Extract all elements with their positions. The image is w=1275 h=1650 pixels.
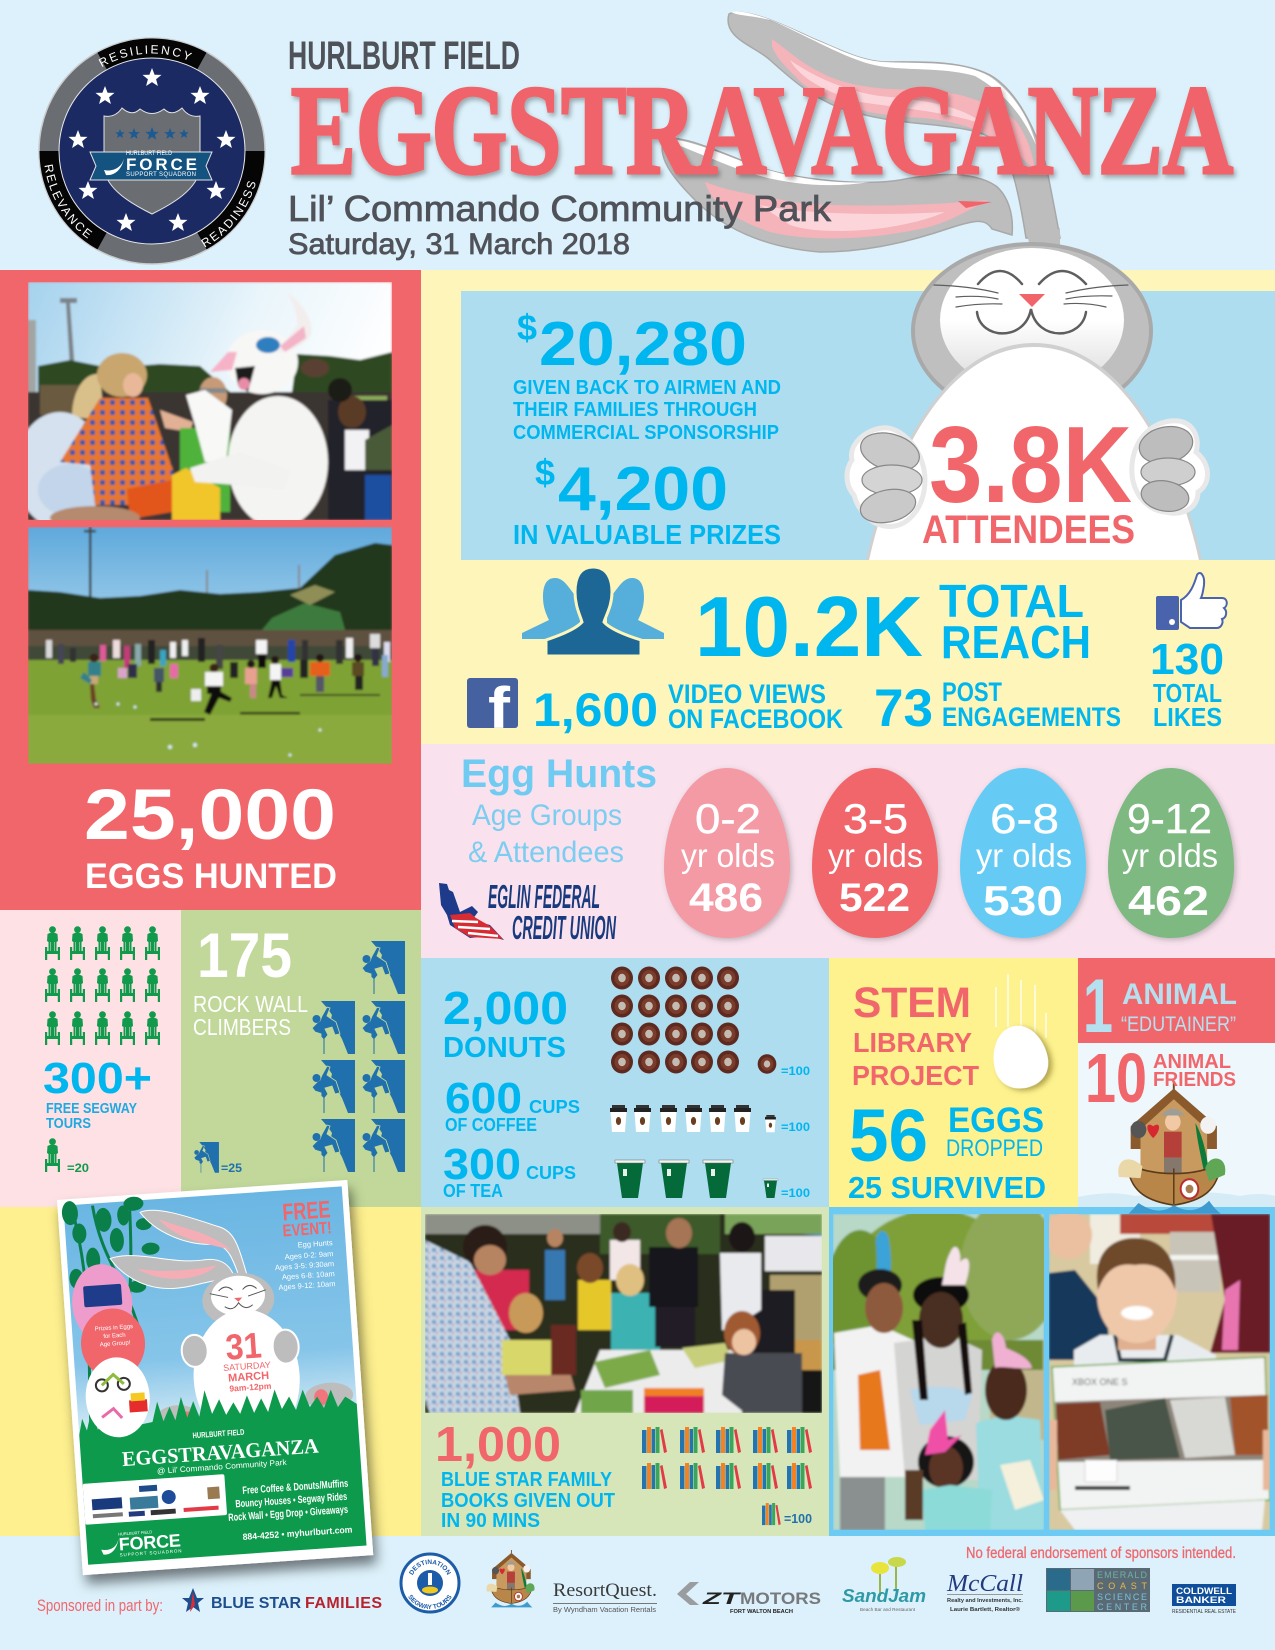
logo: destination segway tours: [400, 1552, 460, 1614]
egg: 0-2: yr olds: [681, 837, 775, 874]
stat: tea: 300: [443, 1140, 521, 1189]
location: Lil’ Commando Community Park: [288, 188, 832, 229]
egg: 3-5: 3-5: [843, 795, 908, 842]
stat: animal edutainer: ANIMAL: [1122, 978, 1237, 1011]
poster force logo: FORCE: [118, 1530, 181, 1555]
logo: coldwell banker: BANKER: [1176, 1595, 1227, 1605]
stat: books: BOOKS GIVEN OUT: [441, 1490, 615, 1512]
logo: blue star families: BLUE STAR: [211, 1595, 301, 1612]
stat: total likes: TOTAL: [1153, 678, 1222, 708]
logo: emerald coast science center: [1046, 1568, 1150, 1612]
poster free event: Ages 0-2: 9am: [284, 1249, 334, 1261]
badge: force support squadron: READINESS: [201, 181, 256, 248]
poster date: MARCH: [228, 1370, 270, 1385]
heading: egg hunts: & Attendees: [468, 836, 624, 869]
poster free event: FREE: [282, 1196, 331, 1226]
stat: total reach: [695, 575, 1091, 675]
stat: post engagements: 73: [874, 679, 933, 738]
poster free event: EVENT!: [282, 1218, 332, 1241]
prizes amount: IN VALUABLE PRIZES: [513, 519, 781, 550]
bunny left hand: [847, 427, 925, 527]
poster free event: Ages 3-5: 9:30am: [275, 1259, 334, 1272]
poster title: HURLBURT FIELD: [192, 1428, 245, 1440]
text: EGLIN FEDERAL: [488, 878, 600, 915]
stat: segway tours: [43, 1054, 152, 1132]
stat: segway tours: 300+: [43, 1054, 152, 1103]
poster prize eggs: [70, 1261, 152, 1440]
pictogram: climbers: [312, 941, 405, 1172]
poster activities: Free Coffee & Donuts/Muffins: [242, 1478, 349, 1497]
poster free event: Ages 9-12: 10am: [278, 1279, 336, 1292]
stat: books: 1,000: [435, 1418, 561, 1472]
stat: segway tours: FREE SEGWAY: [46, 1101, 137, 1117]
legend: climber equals 25: [194, 1142, 242, 1175]
date: Saturday, 31 March 2018: [288, 228, 630, 261]
legend: books equals 100: [762, 1503, 812, 1526]
logo: blue star families: [182, 1588, 382, 1612]
stat: rock wall climbers: ROCK WALL: [193, 991, 308, 1017]
poster date: [220, 1324, 272, 1394]
logo: sandjam: [842, 1557, 926, 1612]
egg: 0-2: 486: [689, 876, 763, 920]
badge: force support squadron: FORCE: [126, 155, 197, 174]
logo: eglin federal credit union: [439, 878, 617, 946]
sponsorship amount: $: [517, 307, 537, 348]
panel: rock wall green: [181, 910, 421, 1207]
pictogram: donuts: [611, 966, 739, 1074]
egg: 9-12: 462: [1128, 877, 1209, 924]
logo: zt motors: [677, 1582, 821, 1615]
stat: attendees: 3.8K: [929, 404, 1132, 526]
stat: eggs dropped: 25 SURVIVED: [848, 1170, 1046, 1205]
bunny face: [934, 271, 1128, 333]
poster free event: [270, 1196, 336, 1292]
stat: eggs dropped: 56: [849, 1094, 928, 1177]
poster force logo: SUPPORT SQUADRON: [119, 1548, 182, 1558]
icon: facebook: [467, 676, 518, 741]
logo: emerald coast science center: COAST: [1097, 1581, 1148, 1591]
poster force logo: [100, 1527, 182, 1559]
stat: video views: [533, 679, 843, 736]
stat: tea: [443, 1140, 576, 1201]
legend: donut equals 100: =100: [781, 1064, 810, 1078]
stat: animal friends: FRIENDS: [1153, 1069, 1236, 1091]
poster prize eggs: for Each: [103, 1333, 126, 1340]
bunny nose: [1019, 294, 1045, 307]
legend: coffee equals 100: [765, 1115, 810, 1134]
logo: sandjam: SandJam: [842, 1586, 926, 1606]
panel: photos blue: [829, 1207, 1275, 1536]
stat: eggs hunted: EGGS HUNTED: [85, 857, 337, 896]
stat: donuts: DONUTS: [443, 1032, 566, 1064]
logo: emerald coast science center: SCIENCE: [1097, 1592, 1147, 1602]
stat: total reach: REACH: [941, 616, 1091, 668]
panel: photos and eggs hunted background: [0, 270, 421, 910]
sponsors label: Sponsored in part by:: [37, 1596, 163, 1615]
stat: coffee: CUPS: [529, 1097, 580, 1117]
egg: 9-12: 9-12: [1127, 795, 1212, 842]
egg: 3-5: 522: [839, 876, 910, 920]
stat: animal friends: 10: [1085, 1039, 1147, 1117]
logo: resortquest: [553, 1580, 657, 1614]
stat: eggs dropped: DROPPED: [946, 1135, 1043, 1162]
stat: animal edutainer: “EDUTAINER”: [1121, 1013, 1236, 1036]
stat: eggs hunted: [84, 776, 337, 896]
stat: video views: VIDEO VIEWS: [668, 679, 826, 709]
panel: books green: [421, 1207, 829, 1536]
egg: 9-12: [1108, 768, 1234, 938]
logo: zt motors: MOTORS: [740, 1589, 821, 1608]
sponsorship amount: [513, 307, 781, 444]
poster prize eggs: Prizes in Eggs: [95, 1324, 133, 1333]
logo: emerald coast science center: CENTER: [1097, 1602, 1148, 1612]
poster force logo: HURLBURT FIELD: [118, 1529, 152, 1537]
photo: boy with xbox prize: [1044, 1211, 1270, 1530]
stat: rock wall climbers: CLIMBERS: [193, 1014, 291, 1040]
poster bunny: [146, 1265, 356, 1452]
stat: eggs hunted: 25,000: [84, 776, 336, 855]
bunny body: [860, 225, 1210, 568]
panel: refreshments blue: [421, 958, 829, 1207]
panel: sponsorship blue: [461, 291, 1275, 560]
egg: 3-5: [812, 768, 938, 938]
poster activities: Bouncy Houses • Segway Rides: [235, 1491, 348, 1510]
poster contact: 884-4252 • myhurlburt.com: [242, 1524, 353, 1542]
prizes amount: 4,200: [558, 455, 728, 524]
stat: books: BLUE STAR FAMILY: [441, 1469, 613, 1491]
logo: coldwell banker: RESIDENTIAL REAL ESTATE: [1172, 1609, 1237, 1615]
sponsorship amount: 20,280: [539, 310, 747, 379]
egg: 6-8: 6-8: [990, 795, 1059, 842]
poster activities: [226, 1478, 351, 1524]
poster: free event flyer: [57, 1180, 373, 1575]
heading: stem library project: STEM: [853, 979, 971, 1027]
stat: books: [435, 1418, 615, 1532]
stat: animal friends: ANIMAL: [1153, 1051, 1231, 1073]
photo: boy with xbox prize: XBOX ONE S: [1072, 1377, 1128, 1387]
logo: zt motors: FORT WALTON BEACH: [730, 1609, 793, 1615]
logo: sandjam: Beach Bar and Restaurant: [860, 1607, 916, 1612]
text: CREDIT UNION: [512, 909, 617, 946]
logo: blue star families: FAMILIES: [305, 1595, 382, 1612]
stat: animal friends: [1085, 1039, 1236, 1117]
stat: total likes: LIKES: [1153, 702, 1222, 732]
stat: coffee: OF COFFEE: [445, 1115, 537, 1135]
logo: mccall realty: Realty and Investments, Inc.: [947, 1598, 1023, 1604]
stat: post engagements: POST: [942, 677, 1002, 707]
poster prize eggs: in Prizes: [93, 1325, 115, 1333]
stat: video views: 1,600: [533, 683, 658, 736]
stat: attendees: ATTENDEES: [922, 508, 1135, 552]
egg: 3-5: yr olds: [828, 837, 923, 874]
panel: animal friends: [1078, 1043, 1275, 1207]
stat: coffee: [445, 1074, 580, 1135]
logo: mccall realty: Laurie Bartlett, Realtor®: [950, 1606, 1020, 1613]
heading: stem library project: LIBRARY: [853, 1027, 972, 1058]
legend: segway equals 20: =20: [67, 1161, 89, 1175]
sponsorship amount: COMMERCIAL SPONSORSHIP: [513, 422, 779, 444]
stat: total likes: 130: [1150, 635, 1224, 684]
title: hurlburt field: HURLBURT FIELD: [288, 34, 520, 78]
pictogram: tea cups: [615, 1160, 733, 1198]
legend: segway equals 20: [45, 1138, 89, 1175]
panel: top yellow: [421, 270, 1275, 744]
stat: eggs dropped: EGGS: [948, 1101, 1044, 1140]
illustration: ark: [1118, 1082, 1225, 1214]
stat: total reach: TOTAL: [939, 575, 1084, 627]
panel: poster yellow: [0, 1207, 421, 1536]
egg: 9-12: yr olds: [1122, 837, 1218, 874]
egg: 0-2: [664, 768, 790, 938]
stat: coffee: 600: [445, 1074, 522, 1123]
stat: post engagements: ENGAGEMENTS: [942, 702, 1121, 732]
poster activities: Rock Wall • Egg Drop • Giveaways: [228, 1504, 349, 1524]
stat: animal edutainer: 1: [1083, 964, 1113, 1049]
logo: mccall realty: McCall: [946, 1571, 1023, 1597]
panel: segway pink: [0, 910, 181, 1207]
panel: egg hunts pink: [421, 744, 1275, 958]
pictogram: segways: [45, 926, 160, 1045]
poster date: SATURDAY: [223, 1360, 271, 1373]
heading: egg hunts: [461, 752, 657, 869]
logo: animal ark: [486, 1550, 535, 1607]
pictogram: books: [642, 1427, 812, 1489]
poster bunny ears: [107, 1204, 249, 1293]
badge: force support squadron: HURLBURT FIELD: [126, 151, 173, 157]
stat: books: IN 90 MINS: [441, 1510, 540, 1532]
stat: rock wall climbers: [193, 921, 308, 1040]
legend: tea equals 100: [763, 1179, 810, 1200]
logo: resortquest: ResortQuest.: [553, 1580, 657, 1601]
panel: stem yellow: [829, 958, 1078, 1207]
stat: total reach: 10.2K: [695, 580, 923, 675]
logo: coldwell banker: [1172, 1584, 1237, 1615]
panel: animal red: [1078, 958, 1275, 1043]
legend: climber equals 25: =25: [221, 1161, 242, 1175]
badge: force support squadron: RELEVANCE: [44, 164, 92, 238]
stat: post engagements: [874, 677, 1121, 738]
poster date: 31: [224, 1324, 263, 1368]
heading: egg hunts: Age Groups: [472, 799, 622, 832]
poster free event: Egg Hunts: [297, 1238, 333, 1250]
stat: animal edutainer: [1083, 964, 1237, 1049]
stat: tea: OF TEA: [443, 1181, 503, 1201]
legend: books equals 100: =100: [784, 1511, 812, 1526]
photo: easter bunny with child: [15, 282, 392, 530]
heading: egg hunts: Egg Hunts: [461, 752, 657, 796]
poster title: EGGSTRAVAGANZA: [121, 1434, 320, 1471]
badge: force support squadron: SUPPORT SQUADRON: [126, 172, 196, 178]
icon: thumbs up: [1156, 573, 1227, 630]
egg: 6-8: yr olds: [976, 837, 1072, 874]
logo: destination segway tours: SEGWAY TOURS: [408, 1594, 452, 1609]
stat: eggs dropped: [848, 1094, 1046, 1205]
legend: donut equals 100: [758, 1054, 810, 1078]
photo: book table: [425, 1214, 822, 1413]
sponsorship amount: GIVEN BACK TO AIRMEN AND: [513, 377, 781, 399]
poster title: @ Lil’ Commando Community Park: [157, 1458, 288, 1476]
stat: donuts: 2,000: [443, 982, 568, 1034]
poster tree: [61, 1195, 172, 1434]
stat: rock wall climbers: 175: [197, 921, 292, 991]
egg: 0-2: 0-2: [695, 795, 761, 842]
poster title: [120, 1423, 321, 1478]
legend: coffee equals 100: =100: [781, 1120, 810, 1134]
stat: segway tours: TOURS: [46, 1116, 91, 1132]
logo: emerald coast science center: EMERALD: [1097, 1570, 1148, 1580]
sponsorship amount: THEIR FAMILIES THROUGH: [513, 399, 757, 421]
logo: resortquest: By Wyndham Vacation Rentals: [553, 1605, 656, 1614]
photo: children running egg hunt: [28, 527, 392, 764]
badge: force support squadron: RESILIENCY: [98, 45, 192, 67]
poster free event: Ages 6-8: 10am: [282, 1269, 335, 1282]
heading: stem library project: [852, 979, 979, 1091]
prizes amount: [513, 452, 781, 550]
poster prize eggs: Age Group!: [100, 1340, 131, 1348]
poster prize eggs: Over $1,000: [88, 1318, 119, 1326]
egg: 6-8: 530: [983, 877, 1063, 924]
heading: stem library project: PROJECT: [852, 1060, 979, 1091]
icon: people: [522, 567, 664, 656]
illustration: bunny ears: [662, 11, 1060, 252]
logo: mccall realty: [946, 1571, 1023, 1613]
prizes amount: $: [535, 452, 555, 493]
poster grass: [77, 1380, 367, 1565]
legend: tea equals 100: =100: [781, 1186, 810, 1200]
stat: total likes: [1150, 635, 1224, 732]
badge: force support squadron: [38, 37, 266, 265]
stat: video views: ON FACEBOOK: [668, 704, 843, 734]
poster sponsors: [83, 1474, 227, 1525]
poster date: 9am-12pm: [229, 1381, 272, 1394]
bunny right hand: [1132, 421, 1208, 515]
egg: 6-8: [960, 768, 1086, 938]
logo: destination segway tours: DESTINATION: [408, 1560, 452, 1575]
logo: zt motors: ZT: [701, 1589, 742, 1608]
stat: donuts: [443, 982, 568, 1064]
photo: families in bunny ears: [833, 1214, 1044, 1530]
icon: falling egg: [987, 974, 1053, 1093]
stat: tea: CUPS: [526, 1163, 576, 1183]
illustration: water behind ark: [1078, 1192, 1275, 1207]
logo: coldwell banker: COLDWELL: [1176, 1586, 1233, 1596]
pictogram: coffee cups: [610, 1105, 751, 1132]
icon: facebook: f: [488, 676, 511, 741]
